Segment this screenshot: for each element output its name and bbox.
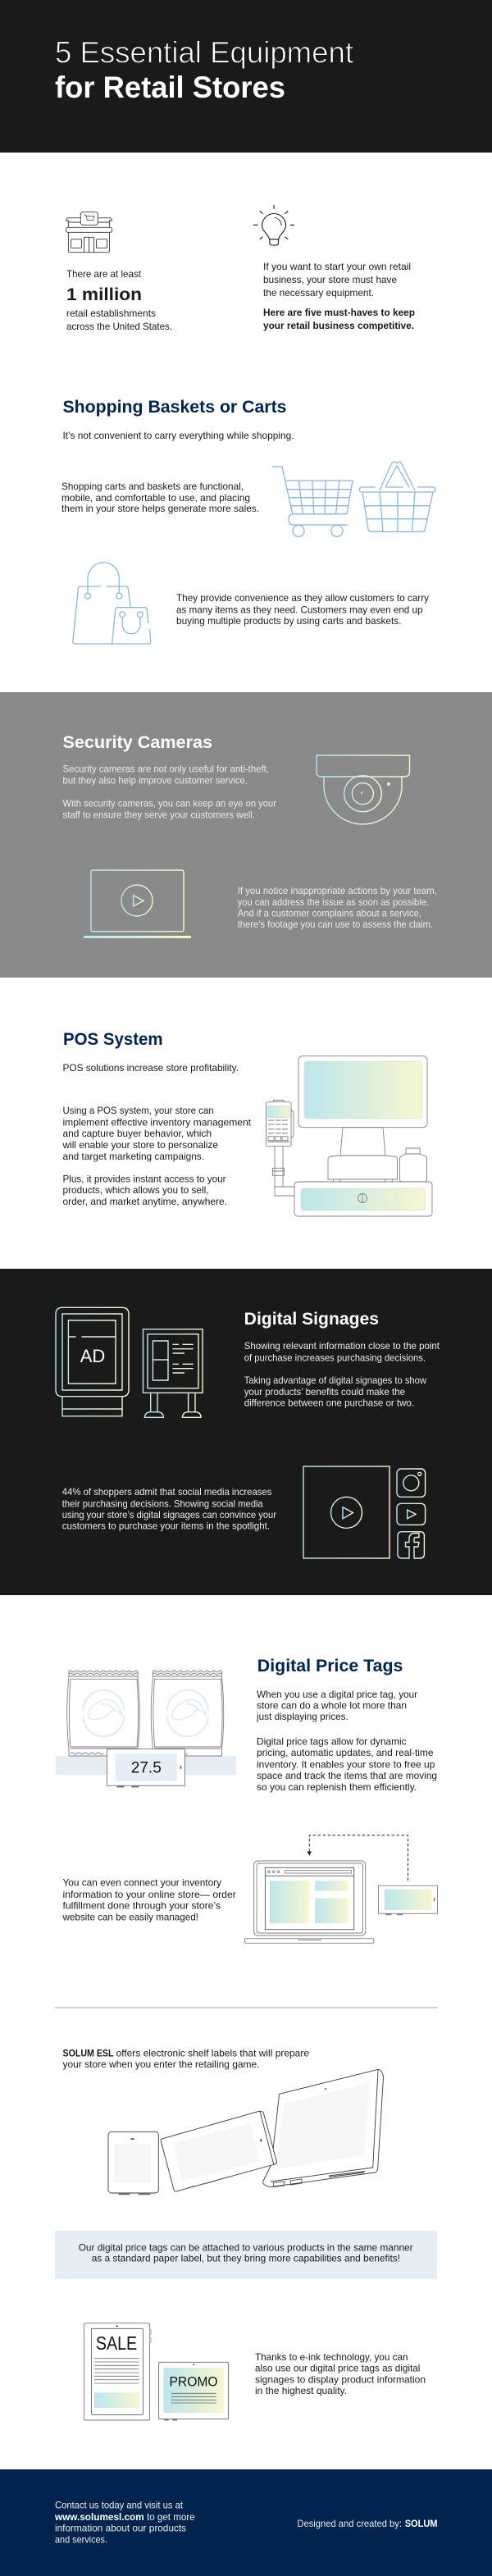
text block [62, 1105, 252, 1207]
heading: Digital Price Tags [257, 1657, 403, 1676]
text block: them in your store helps generate more sales. [61, 503, 259, 514]
icon: youtube [397, 1503, 426, 1525]
intro text: If you want to start your own retail [263, 261, 411, 272]
stat text: 1 million [66, 285, 142, 304]
panel: header [0, 0, 492, 153]
text block: store can do a whole lot more than [257, 1699, 407, 1711]
stat text: retail establishments [66, 308, 156, 319]
credit text: SOLUM [405, 2518, 438, 2529]
icon: standing sign [143, 1329, 203, 1417]
text block: as many items as they need. Customers may even end up [176, 604, 423, 616]
text block [256, 1689, 437, 1793]
text block: Showing relevant information close to the point [244, 1340, 440, 1352]
title: 5 Essential Equipment [55, 36, 354, 70]
callout: Our digital price tags can be attached to various products in the same manner [79, 2241, 413, 2253]
shelf band [56, 1756, 236, 1775]
text block: products, which allows you to sell, [62, 1184, 208, 1196]
text block: Thanks to e-ink technology, you can [255, 2351, 408, 2363]
price tag: 27.5 [131, 1760, 162, 1777]
text block: They provide convenience as they allow customers to carry [176, 592, 429, 604]
receipt printer [328, 1156, 397, 1182]
heading: Security Cameras [62, 733, 212, 752]
illustration: PROMO tablet: PROMO [169, 2373, 218, 2389]
text block: just displaying prices. [256, 1711, 348, 1722]
illustration: shelf with products and price tag [56, 1671, 236, 1788]
title [55, 36, 354, 104]
panel: security cameras [0, 692, 492, 978]
text block: staff to ensure they serve your customers well. [62, 809, 255, 821]
text block: With security cameras, you can keep an eye on your [62, 797, 276, 809]
text block: will enable your store to personalize [62, 1139, 218, 1151]
panel: digital price tags [56, 1657, 437, 1943]
text block: information to your online store— order [62, 1889, 236, 1900]
contact text: to get more [147, 2511, 195, 2523]
text block: your store when you enter the retailing game. [62, 2059, 259, 2070]
text block: also use our digital price tags as digital [255, 2362, 420, 2373]
contact text: Contact us today and visit us at [55, 2500, 184, 2511]
text block: Shopping carts and baskets are functional, [61, 481, 244, 492]
illustration: three electronic shelf labels [108, 2069, 384, 2195]
text block: there’s footage you can use to assess the claim. [238, 919, 433, 930]
text block: signages to display product information [255, 2374, 426, 2386]
text block: inventory. It enables your store to free up [257, 1758, 435, 1770]
product bag right [151, 1671, 224, 1756]
icon: instagram [397, 1469, 426, 1497]
illustration: SALE tablet: SALE [96, 2332, 137, 2354]
illustration: laptop with online store [244, 1861, 374, 1943]
stat text [66, 268, 172, 332]
text block [176, 592, 429, 627]
text block: Digital price tags allow for dynamic [257, 1736, 407, 1748]
icon: shopping cart [272, 467, 353, 536]
title: for Retail Stores [55, 71, 285, 104]
contact text [54, 2500, 195, 2545]
text block: mobile, and comfortable to use, and placing [61, 492, 250, 504]
heading: POS System [63, 1030, 163, 1049]
icon: laptop with play button [84, 870, 191, 938]
text block: your products’ benefits could make the [244, 1386, 405, 1397]
price tag [107, 1749, 184, 1788]
contact text: www.solumesl.com [54, 2511, 144, 2523]
text block: and target marketing campaigns. [62, 1151, 204, 1162]
base drawer [294, 1182, 432, 1216]
text block: It’s not convenient to carry everything while shopping. [62, 430, 294, 441]
large label [263, 2069, 384, 2187]
text block: in the highest quality. [255, 2385, 347, 2396]
stat text: There are at least [66, 268, 142, 280]
panel: e-ink signage [84, 2323, 426, 2420]
icon: basket [359, 462, 435, 531]
heading: Shopping Baskets or Carts [62, 398, 287, 417]
text block [62, 1486, 276, 1532]
text block [255, 2351, 426, 2396]
panel: footer [0, 2469, 492, 2576]
illustration: PROMO tablet [159, 2362, 229, 2420]
illustration: POS terminal [266, 1056, 432, 1216]
text block: 44% of shoppers admit that social media increases [62, 1486, 271, 1498]
text block: Using a POS system, your store can [62, 1105, 214, 1116]
arrow: dashed sync line [307, 1835, 408, 1881]
callout: as a standard paper label, but they bring more capabilities and benefits! [92, 2253, 400, 2264]
intro text [263, 261, 415, 331]
contact text: and services. [55, 2533, 107, 2545]
medium label [161, 2111, 277, 2191]
credit text: Designed and created by: [297, 2518, 402, 2529]
text block: When you use a digital price tag, your [257, 1689, 417, 1700]
text block: difference between one purchase or two. [244, 1397, 414, 1409]
product bag left [67, 1671, 139, 1756]
bottle scanner [400, 1148, 426, 1182]
text block [62, 1877, 236, 1923]
text block [238, 885, 437, 930]
text block [62, 2047, 309, 2070]
icon: light bulb [253, 205, 294, 245]
text block: order, and market anytime, anywhere. [62, 1196, 227, 1207]
text block: their purchasing decisions. Showing social media [62, 1498, 263, 1510]
icon: AD kiosk: AD [80, 1346, 105, 1366]
text block: Taking advantage of digital signages to show [244, 1375, 426, 1386]
panel: POS system [62, 1030, 432, 1216]
heading: Digital Signages [244, 1310, 379, 1329]
intro text: business, your store must have [263, 274, 397, 285]
text block: Security cameras are not only useful for anti-theft, [62, 764, 269, 775]
intro text: your retail business competitive. [263, 320, 414, 331]
small label [108, 2131, 158, 2195]
icon: facebook [398, 1532, 424, 1558]
text block: space and track the items that are moving [257, 1770, 437, 1781]
text block: but they also help improve customer service. [62, 775, 248, 786]
contact text: information about our products [55, 2522, 186, 2533]
text block: POS solutions increase store profitability. [62, 1062, 239, 1074]
icon: store [66, 212, 112, 253]
text block [244, 1340, 440, 1409]
text block: so you can replenish them efficiently. [257, 1781, 417, 1793]
icon: security camera [317, 755, 410, 824]
card terminal [266, 1101, 294, 1196]
text block: customers to purchase your items in the spotlight. [62, 1521, 270, 1532]
text block: And if a customer complains about a service, [238, 908, 421, 919]
text block: fulfillment done through your store’s [62, 1899, 221, 1911]
intro text: Here are five must-haves to keep [263, 307, 415, 318]
icon: AD kiosk [56, 1307, 129, 1416]
callout [55, 2231, 437, 2279]
icon: shopping bags [73, 563, 151, 644]
text block: You can even connect your inventory [62, 1877, 221, 1889]
panel: intro [66, 205, 415, 332]
text block: If you notice inappropriate actions by your team, [238, 885, 437, 896]
illustration: SALE tablet [84, 2323, 151, 2420]
text block: SOLUM ESL [62, 2047, 113, 2059]
text block: offers electronic shelf labels that will prepare [116, 2047, 309, 2059]
text block: of purchase increases purchasing decisions. [244, 1352, 426, 1363]
text block: using your store’s digital signages can convince your [62, 1509, 276, 1521]
intro text: the necessary equipment. [263, 287, 374, 299]
text block: and capture buyer behavior, which [62, 1128, 212, 1139]
small digital tag [379, 1885, 438, 1915]
text block: buying multiple products by using carts and baskets. [176, 615, 402, 627]
panel: shopping baskets or carts [61, 398, 435, 644]
text block: website can be easily managed! [62, 1912, 198, 1923]
monitor [298, 1056, 427, 1156]
text block: pricing, automatic updates, and real-time [257, 1747, 434, 1758]
panel: SOLUM ESL [62, 2047, 384, 2195]
panel: digital signages [0, 1269, 492, 1595]
text block [61, 481, 259, 514]
text block: Plus, it provides instant access to your [62, 1174, 226, 1185]
text block: implement effective inventory management [62, 1117, 252, 1128]
text block: you can address the issue as soon as possible. [238, 896, 429, 908]
stat text: across the United States. [66, 321, 172, 332]
icon: video screen [303, 1466, 390, 1558]
text block [62, 764, 276, 821]
